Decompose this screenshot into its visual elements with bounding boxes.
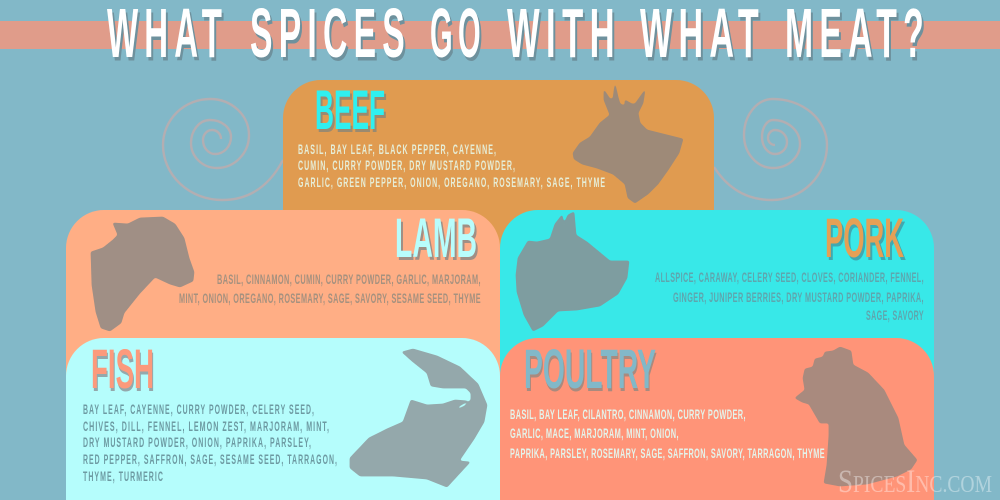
pork heading: PORK	[825, 206, 904, 269]
panel: pork: PORK	[827, 209, 906, 272]
fish panel background	[66, 338, 500, 500]
poultry spice list: GARLIC, MACE, MARJORAM, MINT, ONION,	[510, 425, 679, 441]
pork spice list	[655, 269, 924, 323]
panel: lamb	[66, 206, 500, 410]
fish heading: FISH	[91, 337, 154, 400]
lamb spice list	[179, 271, 481, 306]
panel: poultry	[500, 337, 934, 500]
icon: lamb head	[91, 217, 194, 331]
title band	[0, 21, 1000, 49]
poultry spice list: BASIL, BAY LEAF, CILANTRO, CINNAMON, CURRY POWDER,	[510, 406, 746, 422]
icon: chicken head	[795, 347, 917, 486]
fish spice list: CHIVES, DILL, FENNEL, LEMON ZEST, MARJORAM, MINT,	[83, 419, 330, 434]
beef heading	[315, 78, 387, 144]
panel: pork	[500, 206, 934, 410]
fish spice list: BAY LEAF, CAYENNE, CURRY POWDER, CELERY SEED,	[83, 402, 315, 417]
title	[107, 0, 930, 72]
poultry spice list	[510, 406, 825, 461]
panel: beef: BEEF	[317, 81, 387, 144]
panel: fish: FISH	[92, 340, 155, 403]
lamb heading: LAMB	[395, 206, 477, 269]
icon: pig head	[516, 212, 629, 331]
fish heading	[91, 337, 155, 403]
pork spice list: SAGE, SAVORY	[866, 307, 924, 323]
poultry heading: POULTRY	[524, 337, 656, 400]
icon: fish	[350, 349, 487, 487]
beef spice list: BASIL, BAY LEAF, BLACK PEPPER, CAYENNE,	[298, 142, 497, 157]
left spiral	[163, 99, 283, 200]
beef spice list: CUMIN, CURRY POWDER, DRY MUSTARD POWDER,	[298, 158, 516, 173]
beef panel background	[283, 80, 714, 310]
lamb spice list: BASIL, CINNAMON, CUMIN, CURRY POWDER, GARLIC, MARJORAM,	[217, 271, 481, 287]
fish spice list: DRY MUSTARD POWDER, ONION, PAPRIKA, PARSLEY,	[83, 435, 312, 450]
beef spice list	[298, 142, 606, 190]
poultry panel background	[500, 338, 934, 500]
panel: fish	[66, 337, 500, 500]
right spiral	[714, 99, 827, 200]
lamb heading	[395, 206, 479, 272]
title shadow	[109, 0, 932, 76]
lamb panel background	[66, 210, 500, 410]
fish spice list	[83, 402, 338, 484]
pork heading	[825, 206, 906, 272]
poultry heading	[524, 337, 657, 403]
fish spice list: RED PEPPER, SAFFRON, SAGE, SESAME SEED, TARRAGON,	[83, 452, 338, 467]
panel: beef	[283, 78, 714, 310]
fish spice list: THYME, TURMERIC	[83, 469, 164, 484]
pork panel background	[500, 210, 934, 410]
beef spice list: GARLIC, GREEN PEPPER, ONION, OREGANO, ROSEMARY, SAGE, THYME	[298, 175, 606, 190]
panel: beef: BEEF	[315, 78, 385, 141]
lamb spice list: MINT, ONION, OREGANO, ROSEMARY, SAGE, SAVORY, SESAME SEED, THYME	[179, 290, 481, 306]
poultry heading: POULTRY	[525, 340, 657, 403]
icon: cow head	[573, 84, 683, 203]
lamb heading: LAMB	[397, 209, 479, 272]
